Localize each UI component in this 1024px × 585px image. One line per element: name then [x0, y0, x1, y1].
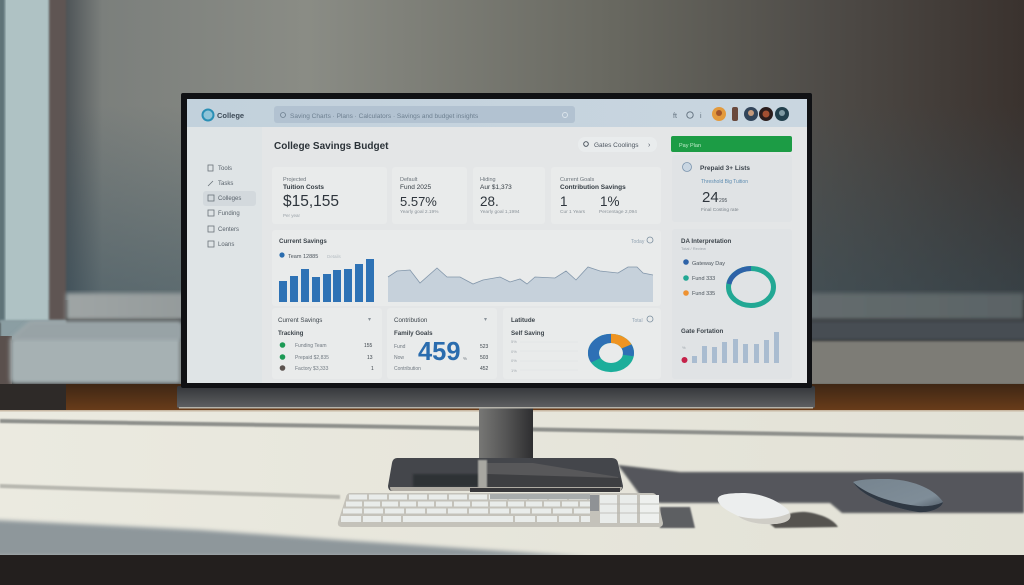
panel: latest savings donut: 5% — [511, 339, 517, 344]
donut chart — [593, 338, 628, 368]
top bar — [187, 99, 807, 127]
panel: contribution: Now — [394, 355, 404, 361]
ring chart — [728, 268, 774, 306]
search bar — [274, 106, 575, 123]
white mouse — [718, 493, 790, 524]
logo: College — [217, 111, 244, 120]
panel: current savings list — [272, 308, 382, 379]
card: tuition costs — [272, 167, 387, 224]
search button: Gates Coolings — [594, 142, 639, 149]
list rows: 1 — [371, 366, 374, 372]
card: contribution savings: Current Goals — [560, 177, 594, 183]
sidebar: Loans — [218, 242, 234, 248]
card: prepaid lists: Prepaid 3+ Lists — [700, 165, 750, 172]
wainscot and bench — [0, 293, 1024, 386]
card: prepaid lists: Threshold Big Tuition — [701, 179, 748, 185]
avatars — [712, 107, 789, 121]
panel: current savings list: Current Savings — [278, 317, 322, 324]
panel: latest savings donut: Latitude — [511, 317, 536, 324]
card: prepaid lists: 24 — [702, 189, 719, 206]
floor band — [0, 384, 1024, 411]
card: 2025 rate — [392, 167, 467, 224]
card: savings amount: 28. — [480, 194, 499, 209]
card: prepaid lists: Final Costing rate — [701, 207, 739, 213]
panel: latest savings donut: Total — [632, 318, 643, 324]
logo — [202, 110, 244, 120]
bar chart — [279, 259, 374, 302]
panel: right column: Gate Fortation — [681, 328, 724, 335]
list rows: 13 — [367, 355, 373, 361]
panel: contribution: 452 — [480, 366, 489, 372]
card: prepaid lists — [672, 155, 792, 222]
card: savings amount — [473, 167, 545, 224]
card: tuition costs: Tuition Costs — [283, 184, 324, 191]
monitor — [177, 93, 815, 408]
legend: Team 12885 — [288, 254, 318, 260]
heading: College Savings Budget — [274, 141, 389, 152]
window light — [0, 0, 49, 322]
desk top — [0, 410, 1024, 556]
panel: right column: % — [682, 345, 686, 350]
panel: latest savings donut: 0% — [511, 349, 517, 354]
card: savings amount: Aur $1,373 — [480, 184, 512, 191]
desk shadows — [0, 419, 1024, 557]
card: savings amount: Yearly goal 1,1994 — [480, 209, 520, 215]
card: contribution savings: Contribution Savings — [560, 184, 626, 191]
sidebar — [187, 127, 262, 383]
toolbar icons: i — [700, 113, 702, 120]
big number: 459 — [418, 338, 461, 366]
card: savings amount: Hiding — [480, 177, 496, 183]
panel: right column: DA Interpretation — [681, 238, 732, 245]
panel: contribution: 523 — [480, 344, 489, 350]
card: 2025 rate: Default — [400, 177, 418, 183]
toolbar icons: ft — [673, 113, 677, 120]
card: contribution savings: 1 — [560, 194, 568, 209]
panel: current savings charts: Today — [631, 239, 645, 245]
panel: latest savings donut: Self Saving — [511, 330, 545, 337]
dark mouse — [853, 479, 943, 512]
legend — [683, 259, 725, 297]
card: prepaid lists: 295 — [719, 198, 728, 204]
panel: contribution — [387, 308, 497, 379]
panel: contribution: ▾ — [484, 317, 487, 323]
card: tuition costs: Per year — [283, 213, 301, 218]
monitor stand — [388, 408, 623, 492]
legend: Fund 335 — [692, 291, 715, 297]
keyboard — [338, 493, 663, 527]
panel: current savings charts — [272, 230, 661, 306]
sidebar: Tools — [218, 166, 232, 172]
monitor bezel — [181, 93, 812, 388]
panel: current savings list: ▾ — [368, 317, 371, 323]
search bar: Saving Charts · Plans · Calculators · Savings and budget insights — [290, 113, 479, 120]
legend: Details — [327, 254, 342, 259]
card: 2025 rate: 5.57% — [400, 194, 437, 209]
card: tuition costs: Projected — [283, 177, 306, 183]
card: tuition costs: $15,155 — [283, 193, 339, 210]
card: 2025 rate: Fund 2025 — [400, 184, 431, 191]
card: contribution savings: Cur 1 Years — [560, 209, 586, 215]
wall background — [0, 0, 1024, 330]
panel: latest savings donut — [503, 308, 661, 379]
panel: right column: Total / Review — [681, 246, 706, 251]
sidebar: Centers — [218, 227, 239, 233]
list rows: Funding Team — [295, 343, 327, 349]
panel: contribution: % — [463, 356, 467, 361]
card: 2025 rate: Yearly goal 2.19% — [400, 209, 439, 215]
card: contribution savings: Percentage 2,094 — [599, 209, 637, 215]
panel: contribution: Fund — [394, 344, 406, 350]
search button — [578, 137, 657, 152]
screen — [187, 99, 807, 383]
green button: Pay Plan — [679, 143, 701, 149]
panel: contribution: Contribution — [394, 317, 428, 324]
small bar chart — [692, 332, 779, 363]
panel: current savings list: Tracking — [278, 330, 304, 337]
panel: contribution: Family Goals — [394, 330, 433, 337]
panel: contribution: Contribution — [394, 366, 421, 372]
monitor chin — [177, 386, 815, 408]
panel: latest savings donut: 0% — [511, 358, 517, 363]
toolbar icons — [673, 112, 702, 120]
list rows: Prepaid $2,835 — [295, 355, 329, 361]
panel: contribution: 503 — [480, 355, 489, 361]
panel: current savings charts: Current Savings — [279, 238, 327, 245]
green button — [671, 136, 792, 152]
legend: Fund 333 — [692, 276, 715, 282]
panel: right column — [672, 229, 792, 379]
list rows: 155 — [364, 343, 373, 349]
legend — [279, 252, 342, 260]
card: contribution savings — [551, 167, 661, 224]
sidebar: Funding — [218, 211, 240, 217]
list rows — [280, 342, 374, 372]
sidebar: Colleges — [218, 196, 241, 202]
list rows: Factory $3,333 — [295, 366, 329, 372]
card: contribution savings: 1% — [600, 194, 620, 209]
sidebar: Tasks — [218, 181, 233, 187]
area chart — [388, 267, 653, 302]
desk front edge — [0, 555, 1024, 585]
search button: › — [648, 142, 651, 149]
legend: Gateway Day — [692, 261, 725, 267]
panel: latest savings donut: 1% — [511, 368, 517, 373]
